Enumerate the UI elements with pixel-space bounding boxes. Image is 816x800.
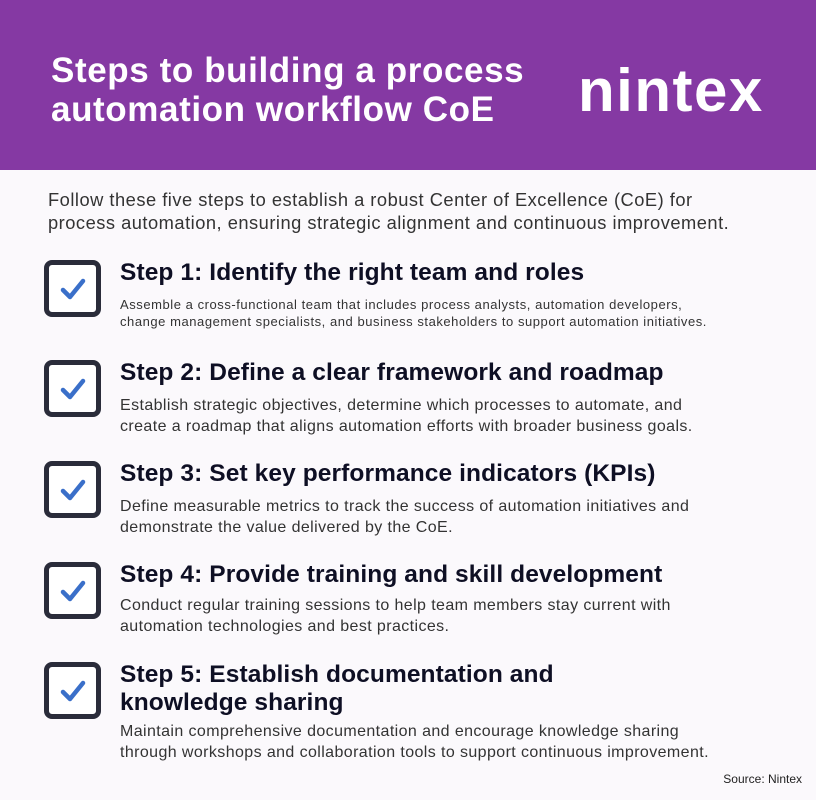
- step 1: Step 1: Identify the right team and roles: [120, 259, 584, 286]
- step 1: [120, 259, 707, 329]
- icon: checkbox 5: [44, 662, 101, 719]
- icon: checkbox 2: [44, 360, 101, 417]
- step 1: Assemble a cross-functional team that includes process analysts, automation developers,: [120, 297, 682, 312]
- step 2: create a roadmap that aligns automation efforts with broader business goals.: [120, 418, 693, 435]
- step 2: Step 2: Define a clear framework and roadmap: [120, 359, 664, 386]
- title: [51, 51, 524, 129]
- step 5: through workshops and collaboration tools to support continuous improvement.: [120, 744, 709, 761]
- logo: nintex: nintex: [578, 57, 764, 124]
- step 4: Conduct regular training sessions to help team members stay current with: [120, 597, 671, 614]
- step 4: Step 4: Provide training and skill development: [120, 561, 662, 588]
- intro text: process automation, ensuring strategic alignment and continuous improvement.: [48, 212, 729, 233]
- source note: Source: Nintex: [723, 772, 802, 786]
- step 3: Define measurable metrics to track the success of automation initiatives and: [120, 498, 689, 515]
- step 5: Step 5: Establish documentation and: [120, 661, 554, 688]
- step 4: [120, 561, 671, 635]
- step 3: Step 3: Set key performance indicators (KPIs): [120, 460, 656, 487]
- step 1: change management specialists, and business stakeholders to support automation initiatives.: [120, 314, 707, 329]
- intro text: [48, 189, 729, 233]
- step 2: Establish strategic objectives, determine which processes to automate, and: [120, 397, 682, 414]
- icon: checkbox 4: [44, 562, 101, 619]
- header banner: [0, 0, 816, 170]
- step 2: [120, 359, 693, 435]
- title: Steps to building a process: [51, 51, 524, 90]
- intro text: Follow these five steps to establish a robust Center of Excellence (CoE) for: [48, 189, 693, 210]
- step 3: [120, 460, 689, 536]
- step 5: knowledge sharing: [120, 689, 344, 716]
- step 5: Maintain comprehensive documentation and encourage knowledge sharing: [120, 723, 679, 740]
- step 3: demonstrate the value delivered by the CoE.: [120, 519, 453, 536]
- icon: checkbox 1: [44, 260, 101, 317]
- step 4: automation technologies and best practices.: [120, 618, 449, 635]
- title: automation workflow CoE: [51, 90, 495, 129]
- step 5: [120, 661, 709, 761]
- icon: checkbox 3: [44, 461, 101, 518]
